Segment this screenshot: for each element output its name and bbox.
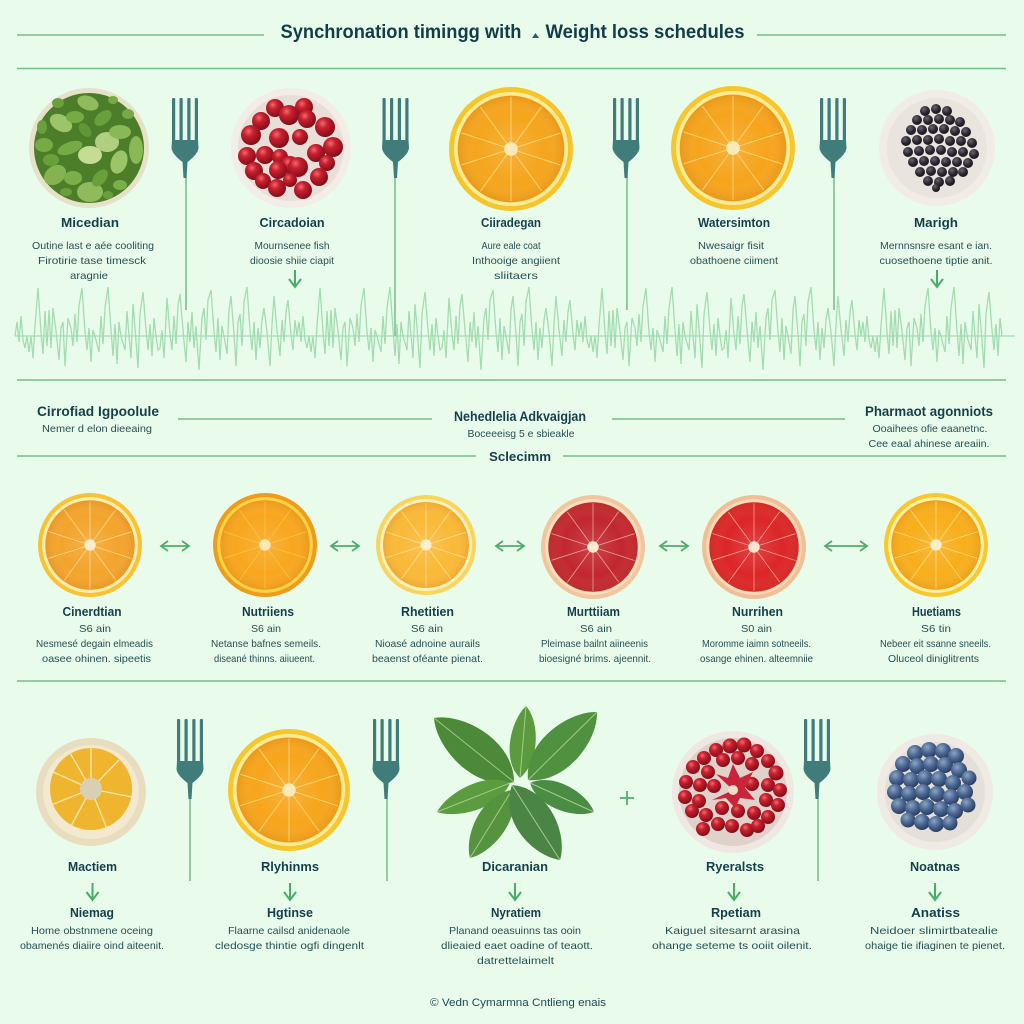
row two text: S0 ain [741,623,772,635]
row three text: ohange seteme ts ooiit oilenit. [652,940,812,952]
row two text: Nurrihen [732,604,783,619]
column text: row one: Mernnsnsre esant e ian. [880,240,992,252]
food: orange slice three [225,728,353,852]
column text: row one: Mournsenee fish [254,240,330,252]
column text: row one: Inthooige angiient [472,255,560,267]
food: blueberries bowl [877,734,993,850]
row two text: oasee ohinen. sipeetis [42,653,151,665]
row two text: Oluceol diniglitrents [888,653,979,665]
row three labels: Rlyhinms [261,859,319,874]
fork markers row three [176,719,830,881]
food: orange slice one [446,86,576,212]
leaf: right [530,780,594,814]
leaf: lower left [469,790,514,858]
row two text: Nesmesé degain elmeadis [36,638,153,650]
column text: row one: aragnie [70,270,108,282]
column text: row one: Marigh [914,215,958,230]
title: Weight loss schedules [546,21,745,43]
column text: row one: obathoene ciiment [690,255,778,267]
row two text: Netanse bafnes semeils. [211,638,321,650]
arrow: row one left [289,270,301,287]
leaf: lower right [509,785,562,860]
plus marker [620,791,634,805]
middle heading: center: Boceeeisg 5 e sbieakle [468,428,575,440]
row three text: Kaiguel sitesarnt arasina [665,925,800,937]
row two text: diseané thinns. aiiueent. [214,653,315,665]
row three text [20,905,1005,967]
row three text: Niemag [70,905,114,920]
leaf: upper right [528,712,597,780]
row three text: Anatiss [911,905,960,920]
title [280,21,745,43]
food: dark berries bowl [879,90,995,206]
leaf: left [437,780,510,814]
row two text: osange ehinen. alteemniie [700,653,813,665]
food: red berries bowl [231,88,351,208]
row three labels: Ryeralsts [706,859,764,874]
food: orange slice two [668,85,798,211]
middle heading: center [454,409,586,440]
row three text: Neidoer slimirtbatealie [870,925,998,937]
row two text: Moromme iaimn sotneeils. [702,638,811,650]
arrow: row one right [931,270,943,287]
leaf: top [510,706,536,778]
column text: row one [32,215,992,282]
row three labels: Mactiem [68,859,117,874]
middle heading: right: Pharmaot agonniots [865,404,993,419]
row two text: bioesigné brims. ajeennit. [539,653,651,665]
row three text: ohaige tie ifiaginen te pienet. [865,940,1005,952]
double arrows between slices [161,541,867,551]
row three text: Flaarne cailsd anidenaole [228,925,350,937]
row three text: Rpetiam [711,905,761,920]
row three text: Nyratiem [491,905,541,920]
row two text: Nebeer eit ssanne sneeils. [880,638,991,650]
leaf: upper left [434,717,514,783]
column text: row one: Watersimton [698,215,770,230]
row three text: Home obstnmene oceing [31,925,153,937]
row two text: Rhetitien [401,604,454,619]
row two text: beaenst oféante pienat. [372,653,483,665]
row three text: Planand oeasuinns tas ooin [449,925,581,937]
title: Synchronation timingg with [280,21,522,43]
column text: row one: Micedian [61,215,119,230]
food: yellow fruit bowl [36,738,146,846]
fork markers row one [172,98,846,336]
footer: © Vedn Cymarmna Cntlieng enais [430,997,607,1009]
column text: row one: Outine last e aée cooliting [32,240,154,252]
row three arrows [86,883,941,900]
food: pomegranate bowl [672,731,794,853]
row two text: S6 ain [251,623,281,635]
row three text: datrettelaimelt [477,955,554,967]
row two text: S6 tin [921,623,951,635]
food: green leaves bowl [29,88,149,208]
heartbeat waveform [15,287,1015,370]
row two text: S6 ain [580,623,612,635]
middle heading: right: Cee eaal ahinese areaiin. [868,438,990,450]
row two text: S6 ain [79,623,111,635]
column text: row one: sliitaers [494,270,538,282]
middle heading: left: Nemer d elon dieeaing [42,423,152,435]
row three text: obamenés diaiire oind aiteenit. [20,940,164,952]
middle heading: left: Cirrofiad Igpoolule [37,404,159,419]
row three text: dlieaied eaet oadine of teaott. [441,940,593,952]
column text: row one: Ciiradegan [481,215,541,230]
row two text: S6 ain [411,623,443,635]
row two text: Murttiiam [567,604,620,619]
row three labels: Noatnas [910,859,960,874]
column text: row one: dioosie shiie ciapit [250,255,334,267]
row three text: cledosge thintie ogfi dingenlt [215,940,364,952]
row two text [36,604,991,665]
row two text: Pleimase bailnt aiineenis [541,638,648,650]
column text: row one: Nwesaigr fisit [698,240,764,252]
middle heading: center: Nehedlelia Adkvaigjan [454,409,586,424]
row three labels: Dicaranian [482,859,548,874]
middle heading: right [865,404,993,450]
row two text: Huetiams [912,604,961,619]
row two text: Nioasé adnoine aurails [375,638,480,650]
row two text: Cinerdtian [62,604,122,619]
column text: row one: cuosethoene tiptie anit. [880,255,992,267]
row three labels [68,859,960,874]
section label: Sclecimm [489,449,551,464]
food: basil leaves [434,706,597,860]
middle heading: left [37,404,159,435]
column text: row one: Aure eale coat [482,240,541,252]
row two citrus slices [36,492,990,600]
row two text: Nutriiens [242,604,294,619]
column text: row one: Circadoian [260,215,325,230]
column text: row one: Firotirie tase timesck [38,255,147,267]
row three text: Hgtinse [267,905,313,920]
middle heading: right: Ooaihees ofie eaanetnc. [872,423,988,435]
